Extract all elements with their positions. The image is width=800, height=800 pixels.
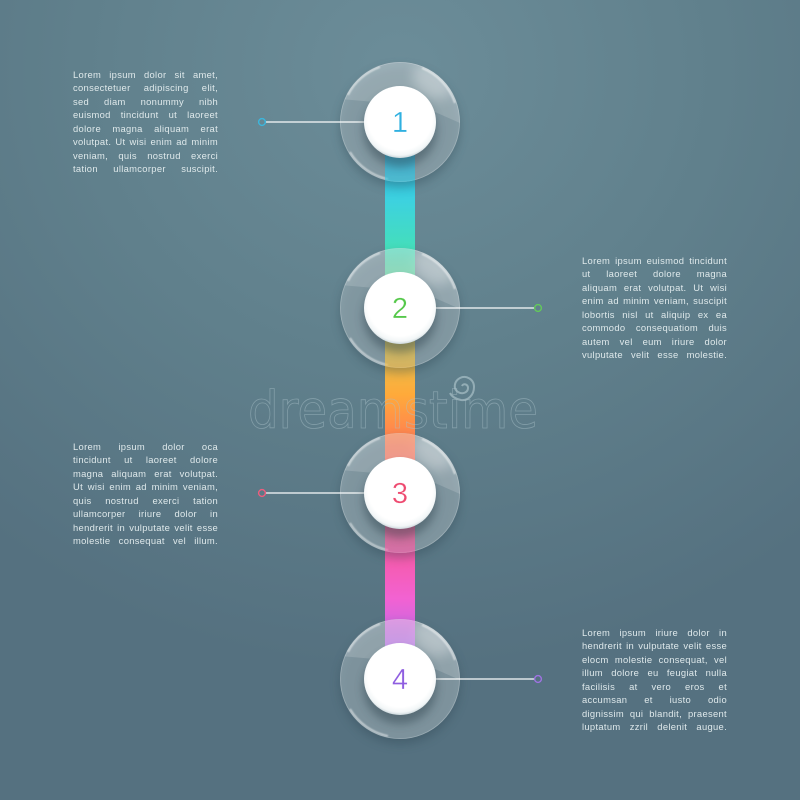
step 4 node: [340, 615, 541, 744]
gradient timeline bar: [385, 150, 415, 660]
text block 3: hendrerit in vulputate velit esse: [73, 522, 218, 533]
text block 4: facilisis at vero eros et: [582, 681, 727, 692]
text block 2: aliquam erat volutpat. Ut wisi: [582, 282, 727, 293]
bar seen through ring 3: [385, 433, 415, 553]
number 2: 2: [392, 293, 408, 325]
text block 2: Lorem ipsum euismod tincidunt: [582, 255, 727, 266]
text block 3: tincidunt ut laoreet dolore: [73, 454, 218, 465]
glass ring 1: [340, 58, 460, 187]
text block 3: Ut wisi enim ad minim veniam,: [73, 481, 218, 492]
step 2 node: [340, 244, 541, 373]
bar seen through ring 1: [385, 122, 415, 182]
text block 1: tation ullamcorper suscipit.: [73, 163, 218, 174]
bar seen through ring 4: [385, 619, 415, 679]
white knob 4: [363, 643, 437, 724]
text block 1: Lorem ipsum dolor sit amet,: [73, 69, 218, 80]
text block 2: lobortis nisl ut aliquip ex ea: [582, 309, 727, 320]
connector line 2: [430, 305, 541, 311]
text block 1: volutpat. Ut wisi enim ad minim: [73, 136, 218, 147]
connector line 3: [259, 490, 370, 496]
text block 4: Lorem ipsum iriure dolor in: [582, 627, 727, 638]
white knob 3: [363, 457, 437, 538]
text block 2: commodo consequatiom duis: [582, 322, 727, 333]
step 1 node: [259, 58, 460, 187]
number 4: 4: [392, 664, 408, 696]
white knob 2: [363, 272, 437, 353]
text block 2: [582, 255, 727, 360]
text block 2: ut laoreet dolore magna: [582, 268, 727, 279]
text block 2: autem vel eum iriure dolor: [582, 336, 727, 347]
text block 3: molestie consequat vel illum.: [73, 535, 218, 546]
text block 3: Lorem ipsum dolor oca: [73, 441, 218, 452]
text block 4: luptatum zzril delenit augue.: [582, 721, 727, 732]
text block 3: quis nostrud exerci tation: [73, 495, 218, 506]
text block 4: illum dolore eu feugiat nulla: [582, 667, 727, 678]
text block 4: hendrerit in vulputate velit esse: [582, 640, 727, 651]
text block 4: [582, 627, 727, 732]
white knob 1: [363, 86, 437, 167]
number 3: 3: [392, 478, 408, 510]
text block 2: vulputate velit esse molestie.: [582, 349, 727, 360]
text block 4: accumsan et iusto odio: [582, 694, 727, 705]
text block 1: veniam, quis nostrud exerci: [73, 150, 218, 161]
text block 2: enim ad minim veniam, suscipit: [582, 295, 727, 306]
step 3 node: [259, 429, 460, 558]
number 1: 1: [392, 107, 408, 139]
bar seen through ring 2: [385, 248, 415, 368]
connector line 1: [259, 119, 370, 125]
text block 4: elocm molestie consequat, vel: [582, 654, 727, 665]
text block 1: consectetuer adipiscing elit,: [73, 82, 218, 93]
connector line 4: [430, 676, 541, 682]
text block 1: sed diam nonummy nibh: [73, 96, 218, 107]
glass ring 3: [340, 429, 460, 558]
text block 1: [73, 69, 218, 174]
glass ring 2: [340, 244, 460, 373]
text block 3: [73, 441, 218, 546]
glass ring 4: [340, 615, 460, 744]
text block 1: dolore magna aliquam erat: [73, 123, 218, 134]
text block 3: magna aliquam erat volutpat.: [73, 468, 218, 479]
text block 3: ullamcorper iriure dolor in: [73, 508, 218, 519]
watermark: dreamstime: [248, 381, 538, 441]
text block 1: euismod tincidunt ut laoreet: [73, 109, 218, 120]
text block 4: dignissim qui blandit, praesent: [582, 708, 727, 719]
